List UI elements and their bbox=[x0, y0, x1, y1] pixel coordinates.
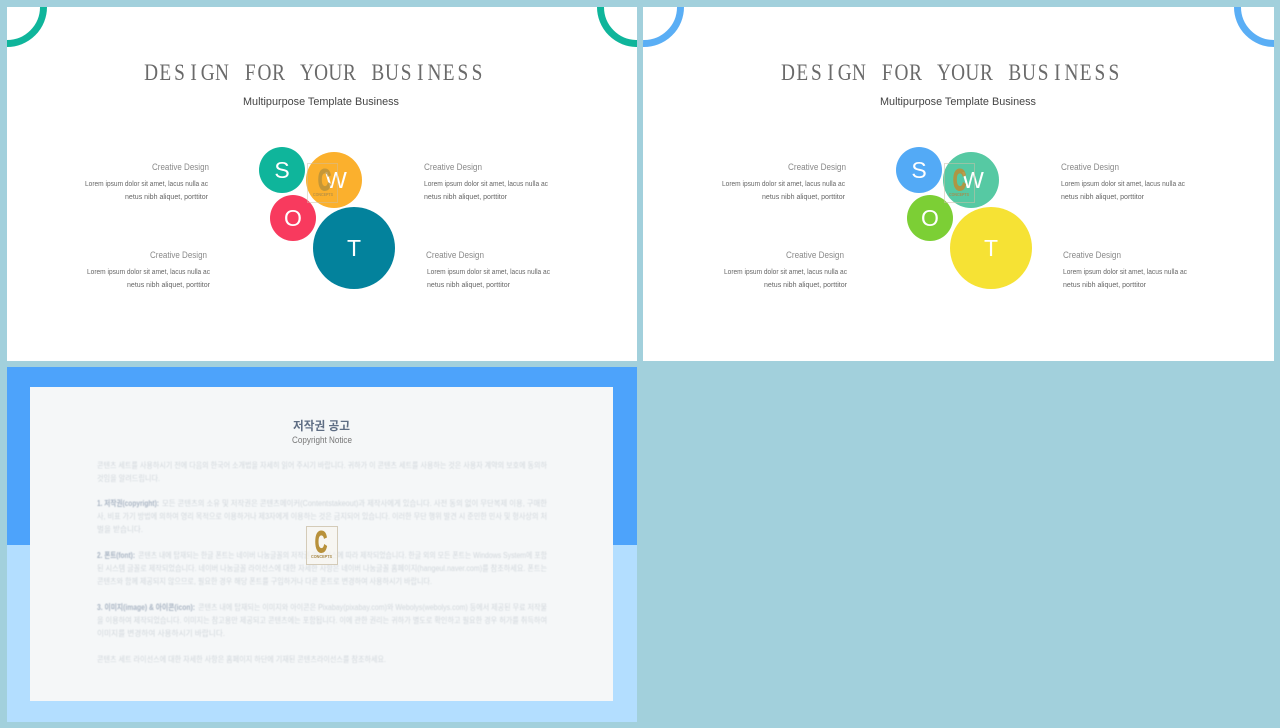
subtitle: Multipurpose Template Business bbox=[880, 96, 1036, 108]
text block: section 1 copyright: 모든 콘텐츠의 소유 및 저작권은 콘텐츠메이커(Contentstakeout)과 제작사에게 있습니다. 사전 동의 없이 무단복제 이용, 구매한 bbox=[162, 498, 548, 508]
icon: watermark logo bbox=[308, 164, 338, 202]
panel: copyright notice slide bbox=[7, 367, 637, 722]
circle: W bbox=[943, 152, 999, 208]
text block: bottom right: Lorem ipsum dolor sit amet, lacus nulla ac bbox=[1063, 269, 1187, 276]
icon: top-left corner arc bbox=[7, 7, 44, 44]
text block: top right bbox=[424, 162, 548, 201]
circle: O bbox=[907, 195, 953, 241]
icon: watermark logo: CONCEPTS bbox=[311, 554, 332, 559]
circle: O bbox=[270, 195, 316, 241]
text block: section 3 image and icon: 이미지를 변경하여 사용하시기 바랍니다. bbox=[97, 628, 225, 638]
icon: watermark logo: C bbox=[318, 164, 331, 197]
text block: introduction: 것임을 알려드립니다. bbox=[97, 473, 160, 483]
circle: W bbox=[306, 152, 362, 208]
text block: top left: netus nibh aliquet, porttitor bbox=[762, 194, 846, 201]
text block: section 1 copyright: 벌을 받습니다. bbox=[97, 524, 143, 534]
circle: O: O bbox=[921, 205, 939, 231]
text block: section 3 image and icon: 콘텐츠 내에 탑재되는 이미지와 아이콘은 Pixabay(pixabay.com)와 Webolys(webolys.com) 등에서 제공된 무료 저작물 bbox=[198, 602, 547, 612]
panel: SWOT slide, bright bbox=[643, 7, 1274, 361]
icon: watermark logo: CONCEPTS bbox=[313, 192, 333, 197]
text block: top left: Lorem ipsum dolor sit amet, lacus nulla ac bbox=[85, 181, 208, 188]
text block: top right: netus nibh aliquet, porttitor bbox=[424, 194, 508, 201]
text block: top left: netus nibh aliquet, porttitor bbox=[125, 194, 209, 201]
circle: T bbox=[313, 207, 395, 289]
text block: section 1 copyright: 1. 저작권(copyright): bbox=[97, 498, 159, 508]
text block: bottom left bbox=[724, 250, 848, 289]
text block: bottom left: netus nibh aliquet, porttitor bbox=[127, 282, 211, 289]
text block: top right: Creative Design bbox=[424, 162, 482, 172]
text block: bottom left: Creative Design bbox=[150, 250, 207, 260]
circle: W: W bbox=[962, 167, 984, 193]
text block: top left: Creative Design bbox=[788, 162, 846, 172]
icon: watermark logo: CONCEPTS bbox=[949, 192, 969, 197]
text block: introduction bbox=[97, 460, 548, 483]
text block: bottom right: Creative Design bbox=[426, 250, 484, 260]
text block: bottom right bbox=[1063, 250, 1187, 289]
text block: bottom right: netus nibh aliquet, porttitor bbox=[427, 282, 511, 289]
circle: O: O bbox=[284, 205, 302, 231]
panel: SWOT slide, multicolour bbox=[7, 7, 637, 361]
subtitle: Multipurpose Template Business bbox=[243, 96, 399, 108]
text block: bottom left: Lorem ipsum dolor sit amet, lacus nulla ac bbox=[87, 269, 210, 276]
text block: bottom right bbox=[426, 250, 550, 289]
circle: T: T bbox=[347, 235, 361, 261]
title: DESIGN FOR YOUR BUSINESS bbox=[144, 60, 482, 85]
text block: bottom left: netus nibh aliquet, porttitor bbox=[764, 282, 848, 289]
text block: section 1 copyright: 사, 비표 가기 방법에 의하여 영리 목적으로 이용하거나 제3자에게 이용하는 것은 금지되어 있습니다. 이러한 무단 행위 발견 시 준민한 민사 및 형사상의 처 bbox=[97, 511, 547, 521]
text block: top left bbox=[722, 162, 846, 201]
icon: watermark logo: C bbox=[953, 164, 966, 197]
text block: bottom right: Creative Design bbox=[1063, 250, 1121, 260]
circle: S: S bbox=[911, 157, 927, 183]
subheading: Copyright Notice bbox=[292, 435, 352, 445]
circle: W: W bbox=[325, 167, 347, 193]
text block: bottom left bbox=[87, 250, 211, 289]
text block: bottom right: netus nibh aliquet, porttitor bbox=[1063, 282, 1147, 289]
text block: top right: netus nibh aliquet, porttitor bbox=[1061, 194, 1145, 201]
icon: top-right corner arc bbox=[1238, 7, 1274, 44]
notice card bbox=[30, 387, 613, 701]
text block: top left: Lorem ipsum dolor sit amet, lacus nulla ac bbox=[722, 181, 845, 188]
text block: section 1 copyright bbox=[97, 498, 548, 534]
circle: S bbox=[896, 147, 942, 193]
text block: section 2 font: 2. 폰트(font): bbox=[97, 551, 135, 560]
text block: section 2 font bbox=[97, 550, 548, 586]
text block: top left bbox=[85, 162, 209, 201]
text block: bottom right: Lorem ipsum dolor sit amet, lacus nulla ac bbox=[427, 269, 550, 276]
circle: S bbox=[259, 147, 305, 193]
icon: top-right corner arc bbox=[600, 7, 637, 44]
text block: top right: Lorem ipsum dolor sit amet, lacus nulla ac bbox=[424, 181, 548, 188]
icon: watermark logo: C bbox=[315, 526, 327, 559]
text block: section 3 image and icon: 을 이용하여 제작되었습니다. 이미지는 참고용만 제공되고 콘텐츠에는 포함됩니다. 이에 관한 권리는 귀하가 별도로 확인하고 필요한 경우 허가를 취득하여 bbox=[97, 615, 547, 625]
circle: T: T bbox=[984, 235, 998, 261]
text block: closing line: 콘텐츠 세트 라이선스에 대한 자세한 사항은 홈페이지 하단에 기재된 콘텐츠라이선스를 참조하세요. bbox=[97, 654, 386, 664]
circle: S: S bbox=[274, 157, 290, 183]
text block: top right: Creative Design bbox=[1061, 162, 1119, 172]
heading: 저작권 공고 bbox=[293, 418, 350, 433]
text block: bottom left: Creative Design bbox=[786, 250, 844, 260]
circle: T bbox=[950, 207, 1032, 289]
text block: section 2 font: 콘텐츠 내에 탑재되는 한글 폰트는 네이버 나눔글꼴의 저작권 라이선스에 따라 제작되었습니다. 한글 외의 모든 폰트는 Windows System에 포함 bbox=[138, 550, 548, 560]
icon: top-left corner arc bbox=[643, 7, 680, 44]
text block: top left: Creative Design bbox=[152, 162, 209, 172]
text block: section 2 font: 된 시스템 글꼴로 제작되었습니다. 네이버 나눔글꼴 라이선스에 대한 자세한 사항은 네이버 나눔글꼴 홈페이지(hangeul.naver.com)를 참조하세요. 폰트는 bbox=[97, 563, 547, 573]
text block: bottom left: Lorem ipsum dolor sit amet, lacus nulla ac bbox=[724, 269, 847, 276]
text block: section 3 image and icon: 3. 이미지(image) & 아이콘(icon): bbox=[97, 602, 195, 612]
text block: section 3 image and icon bbox=[97, 602, 547, 638]
icon: watermark logo bbox=[944, 164, 974, 202]
text block: top right: Lorem ipsum dolor sit amet, lacus nulla ac bbox=[1061, 181, 1185, 188]
text block: section 2 font: 콘텐츠와 함께 제공되지 않으므로, 필요한 경우 해당 폰트를 구입하거나 다른 폰트로 변경하여 사용하시기 바랍니다. bbox=[97, 576, 432, 586]
text block: introduction: 콘텐츠 세트를 사용하시기 전에 다음의 한국어 소개법을 자세히 읽어 주시기 바랍니다. 귀하가 이 콘텐츠 세트를 사용하는 것은 사용자 계약의 보호에 동의하 bbox=[97, 460, 548, 470]
icon: watermark logo bbox=[306, 526, 338, 564]
text block: top right bbox=[1061, 162, 1185, 201]
title: DESIGN FOR YOUR BUSINESS bbox=[781, 60, 1119, 85]
